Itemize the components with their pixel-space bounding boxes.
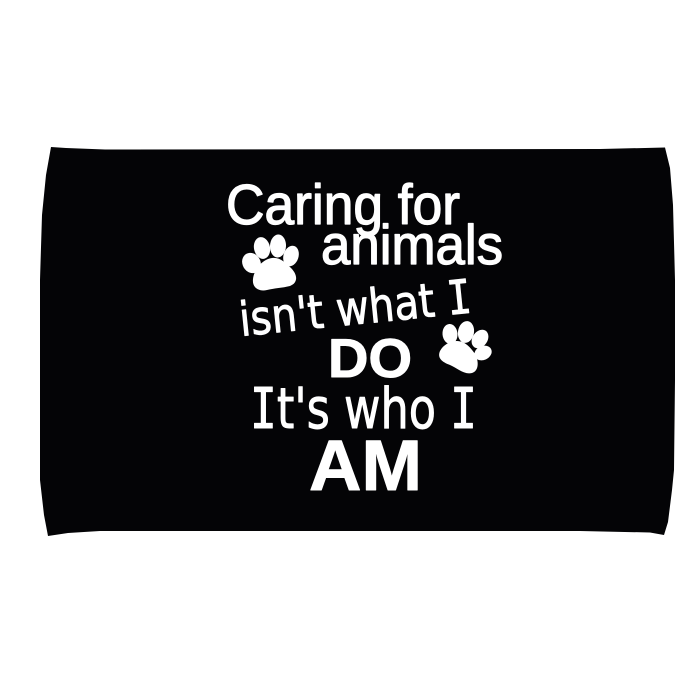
heading: Caring for: Caring for bbox=[226, 173, 460, 237]
text: It's who I: It's who I bbox=[250, 377, 477, 442]
panel: black towel bbox=[40, 147, 675, 536]
heading: animals: animals bbox=[321, 213, 503, 276]
text: AM: AM bbox=[309, 427, 422, 506]
icon: paw print right bbox=[439, 320, 494, 373]
text: isn't what I: isn't what I bbox=[237, 270, 474, 348]
icon: paw print left bbox=[238, 234, 301, 290]
text: DO: DO bbox=[328, 327, 412, 389]
